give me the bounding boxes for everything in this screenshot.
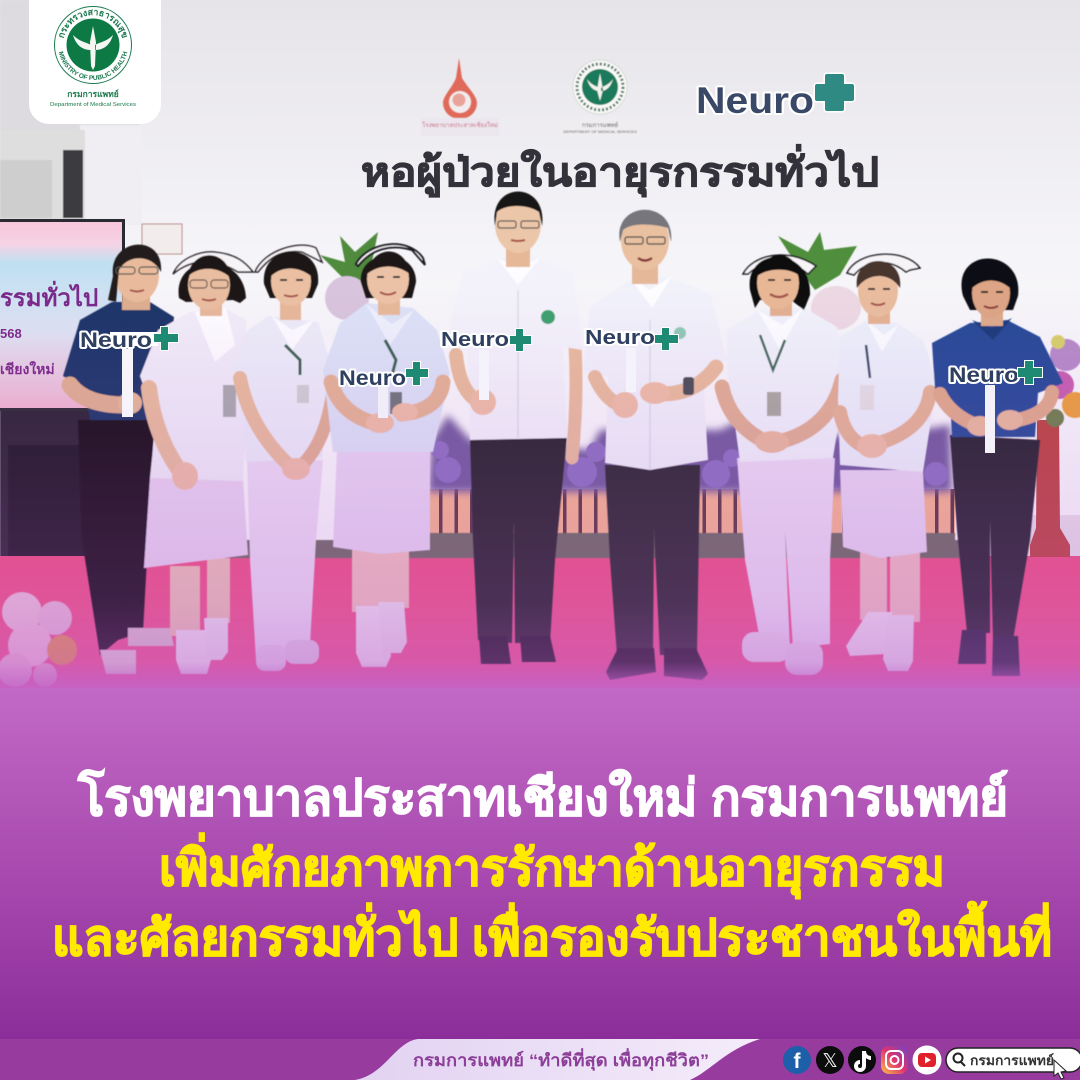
floral backdrop, fence and floor bbox=[0, 232, 1080, 690]
person 8: nurse in skirt bbox=[838, 254, 937, 671]
logo: Neurological Hospital bbox=[421, 58, 499, 136]
wall background bbox=[0, 0, 1080, 560]
logo: Neuro plus: Neuro bbox=[696, 80, 814, 121]
side flowers bbox=[1046, 335, 1080, 427]
person 5: man in white shirt bbox=[450, 192, 583, 664]
purple fade over photo bottom bbox=[0, 290, 1080, 690]
sign 2: Neuro bbox=[339, 367, 406, 390]
icon: youtube bbox=[912, 1046, 942, 1074]
sign 1 bbox=[80, 327, 178, 417]
sign 2 bbox=[339, 362, 428, 418]
presentation screen: รรมทั่วไป bbox=[0, 280, 98, 312]
person 2: nurse in lilac dress bbox=[140, 252, 253, 674]
sign 5: Neuro bbox=[949, 364, 1019, 387]
logo text: กรมการแพทย์ bbox=[67, 89, 119, 99]
search box: กรมการแพทย์ bbox=[970, 1053, 1054, 1068]
person 1: staff in navy polo bbox=[63, 245, 174, 674]
red pillar bbox=[1030, 420, 1070, 557]
wall sign heading: หอผู้ป่วยในอายุรกรรมทั่วไป bbox=[361, 144, 879, 198]
people group bbox=[63, 192, 1063, 680]
footer bar bbox=[0, 1039, 1080, 1080]
presentation screen: 568 bbox=[0, 326, 22, 341]
photo: hospital ward opening ceremony bbox=[0, 0, 1080, 690]
sign 3: Neuro bbox=[441, 329, 509, 351]
person 6: man in white shirt bbox=[583, 210, 727, 680]
wall sign logos bbox=[361, 58, 879, 198]
presentation screen bbox=[0, 219, 125, 411]
headline line 1: โรงพยาบาลประสาทเชียงใหม่ กรมการแพทย์ bbox=[77, 768, 1008, 826]
hydrangea clusters bbox=[431, 441, 948, 488]
person 3: nurse in lilac trouser uniform bbox=[233, 245, 332, 671]
sign 4 bbox=[585, 327, 678, 392]
presentation screen: เชียงใหม่ bbox=[0, 360, 55, 377]
logo: Department of Medical Services: DEPARTMENT OF MEDICAL SERVICES bbox=[563, 129, 637, 134]
icon: X bbox=[816, 1046, 844, 1074]
logo card: Department of Medical Services bbox=[29, 0, 161, 124]
icon: X: 𝕏 bbox=[822, 1051, 838, 1072]
left wall column and door frame bbox=[0, 0, 182, 595]
search box bbox=[946, 1048, 1080, 1079]
flower pile bbox=[0, 592, 77, 687]
sign 1: Neuro bbox=[80, 329, 152, 352]
slogan ribbon: กรมการแพทย์ “ทำดีที่สุด เพื่อทุกชีวิต” bbox=[413, 1048, 709, 1071]
seal: MINISTRY OF PUBLIC HEALTH bbox=[58, 51, 128, 80]
sign 5 bbox=[949, 361, 1042, 453]
sign 4: Neuro bbox=[585, 327, 655, 349]
logo: Neuro plus bbox=[696, 74, 854, 121]
Neuro+ hand signs bbox=[80, 327, 1042, 453]
sign 3 bbox=[441, 329, 531, 400]
seal bbox=[54, 6, 132, 84]
logo: Neurological Hospital: โรงพยาบาลประสาทเชียงใหม่ bbox=[422, 121, 498, 129]
icon: facebook bbox=[783, 1046, 811, 1074]
headline line 3: และศัลยกรรมทั่วไป เพื่อรองรับประชาชนในพื้นที่ bbox=[52, 901, 1052, 966]
logo card: Department of Medical Services: Department of Medical Services bbox=[50, 102, 136, 108]
person 4: nurse in lilac skirt bbox=[323, 244, 450, 667]
headline panel bbox=[0, 688, 1080, 1040]
icon: instagram bbox=[881, 1046, 908, 1074]
icon: tiktok bbox=[848, 1046, 876, 1074]
potted plants bbox=[320, 232, 861, 330]
icon: cursor bbox=[1054, 1060, 1066, 1079]
logo: Department of Medical Services: กรมการแพทย์ bbox=[582, 121, 618, 129]
person 9: staff in navy polo bbox=[932, 258, 1063, 676]
person 7: nurse in trouser uniform bbox=[722, 255, 847, 675]
headline line 2: เพิ่มศักยภาพการรักษาด้านอายุรกรรม bbox=[159, 833, 945, 899]
logo: Department of Medical Services bbox=[559, 60, 641, 136]
seal: กระทรวงสาธารณสุข bbox=[59, 9, 128, 38]
slogan ribbon bbox=[355, 1039, 760, 1080]
icon: facebook: f bbox=[794, 1050, 802, 1073]
